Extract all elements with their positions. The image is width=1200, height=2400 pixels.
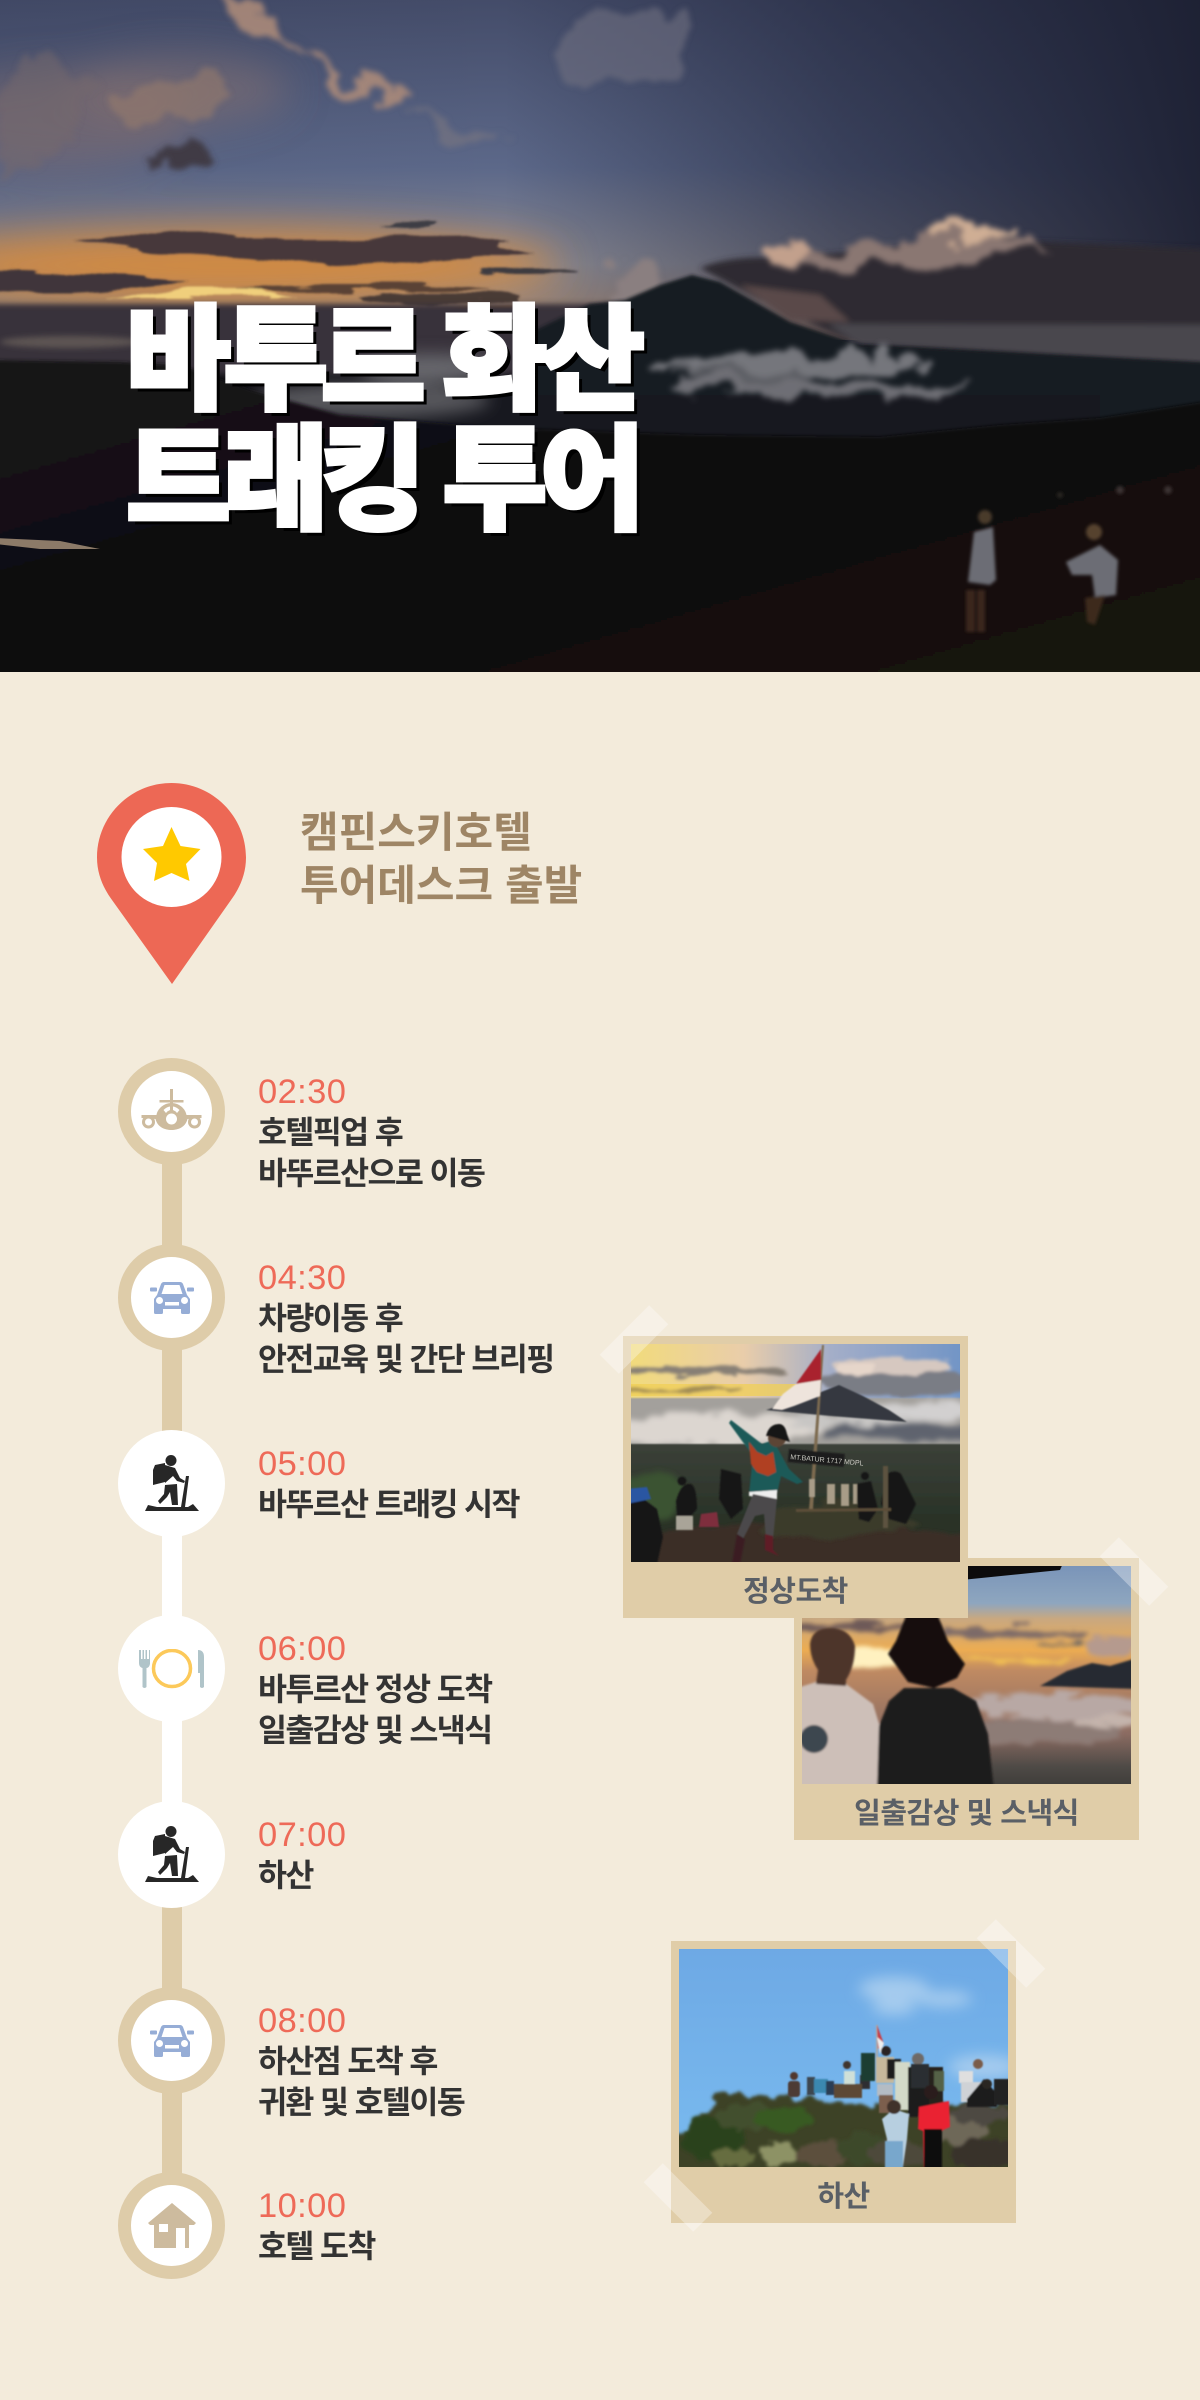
heading: departure location (300, 799, 582, 913)
panel: departure point (97, 783, 246, 984)
step 08:00 text (258, 2002, 464, 2122)
step 02:30 text (258, 1073, 485, 1194)
decorative tape: summit card (600, 1305, 668, 1374)
step 07:00 text (258, 1816, 346, 1896)
caption: descent: 하산 (817, 2173, 870, 2215)
step 08:00 icon: car (118, 1987, 225, 2094)
photo: two people watching sunrise (802, 1566, 1131, 1784)
step 06:00 text: 일출감상 및 스낵식 (258, 1704, 491, 1750)
step 08:00 text: 귀환 및 호텔이동 (258, 2076, 464, 2122)
decorative tape: descent card top (977, 1919, 1045, 1988)
photo card: summit arrival (623, 1336, 968, 1618)
photo card: sunrise viewing and snack (794, 1558, 1139, 1840)
step 05:00 text: 바뚜르산 트래킹 시작 (258, 1479, 519, 1525)
step 08:00 text: 하산점 도착 후 (258, 2036, 437, 2082)
step 10:00 text: 호텔 도착 (258, 2221, 375, 2267)
timeline connectors (162, 1164, 182, 2173)
step 07:00 text: 하산 (258, 1850, 313, 1896)
step 06:00 text: 06:00 (258, 1630, 346, 1668)
sign text: MT.BATUR 1717 MDPL (790, 1454, 864, 1468)
photo card: descent (671, 1941, 1016, 2223)
step 05:00 text: 05:00 (258, 1445, 346, 1483)
step 06:00 icon: plate and cutlery (118, 1615, 225, 1722)
step 04:30 text: 차량이동 후 (258, 1293, 402, 1339)
step 04:30 text: 안전교육 및 간단 브리핑 (258, 1334, 553, 1380)
step 06:00 text: 바투르산 정상 도착 (258, 1664, 491, 1710)
hero title: 바투르 화산 (126, 268, 637, 433)
step 07:00 icon: hiker (118, 1801, 225, 1908)
step 07:00 text: 07:00 (258, 1816, 346, 1854)
heading: departure location: 투어데스크 출발 (300, 852, 582, 913)
step 10:00 text (258, 2187, 376, 2267)
step 04:30 text: 04:30 (258, 1259, 346, 1297)
step 10:00 text: 10:00 (258, 2187, 346, 2225)
hero photo: volcano at sunrise (0, 0, 1200, 634)
step 04:30 icon: car (118, 1244, 225, 1351)
caption: sunrise viewing and snack: 일출감상 및 스낵식 (854, 1790, 1079, 1832)
panel: hero banner (0, 0, 1200, 672)
step 05:00 text (258, 1445, 520, 1525)
hero title: 트래킹 투어 (126, 388, 637, 553)
step 02:30 icon: airplane (118, 1058, 225, 1165)
caption: summit arrival: 정상도착 (743, 1568, 848, 1610)
icon: map pin with star (97, 783, 246, 984)
hero title (126, 268, 648, 553)
step 08:00 text: 08:00 (258, 2002, 346, 2040)
heading: departure location: 캠핀스키호텔 (300, 799, 532, 860)
step 06:00 text (258, 1630, 492, 1750)
step 02:30 text: 바뚜르산으로 이동 (258, 1148, 484, 1194)
step 04:30 text (258, 1259, 553, 1380)
step 02:30 text: 02:30 (258, 1073, 346, 1111)
decorative tape: descent card bottom (644, 2163, 712, 2232)
photo: hiker posing at the summit flag (631, 1344, 960, 1562)
decorative tape: sunrise card (1100, 1537, 1168, 1606)
step 10:00 icon: house (118, 2172, 225, 2279)
step 05:00 icon: hiker (118, 1430, 225, 1537)
step 02:30 text: 호텔픽업 후 (258, 1107, 402, 1153)
photo: crowd on the summit under blue sky (679, 1949, 1008, 2167)
